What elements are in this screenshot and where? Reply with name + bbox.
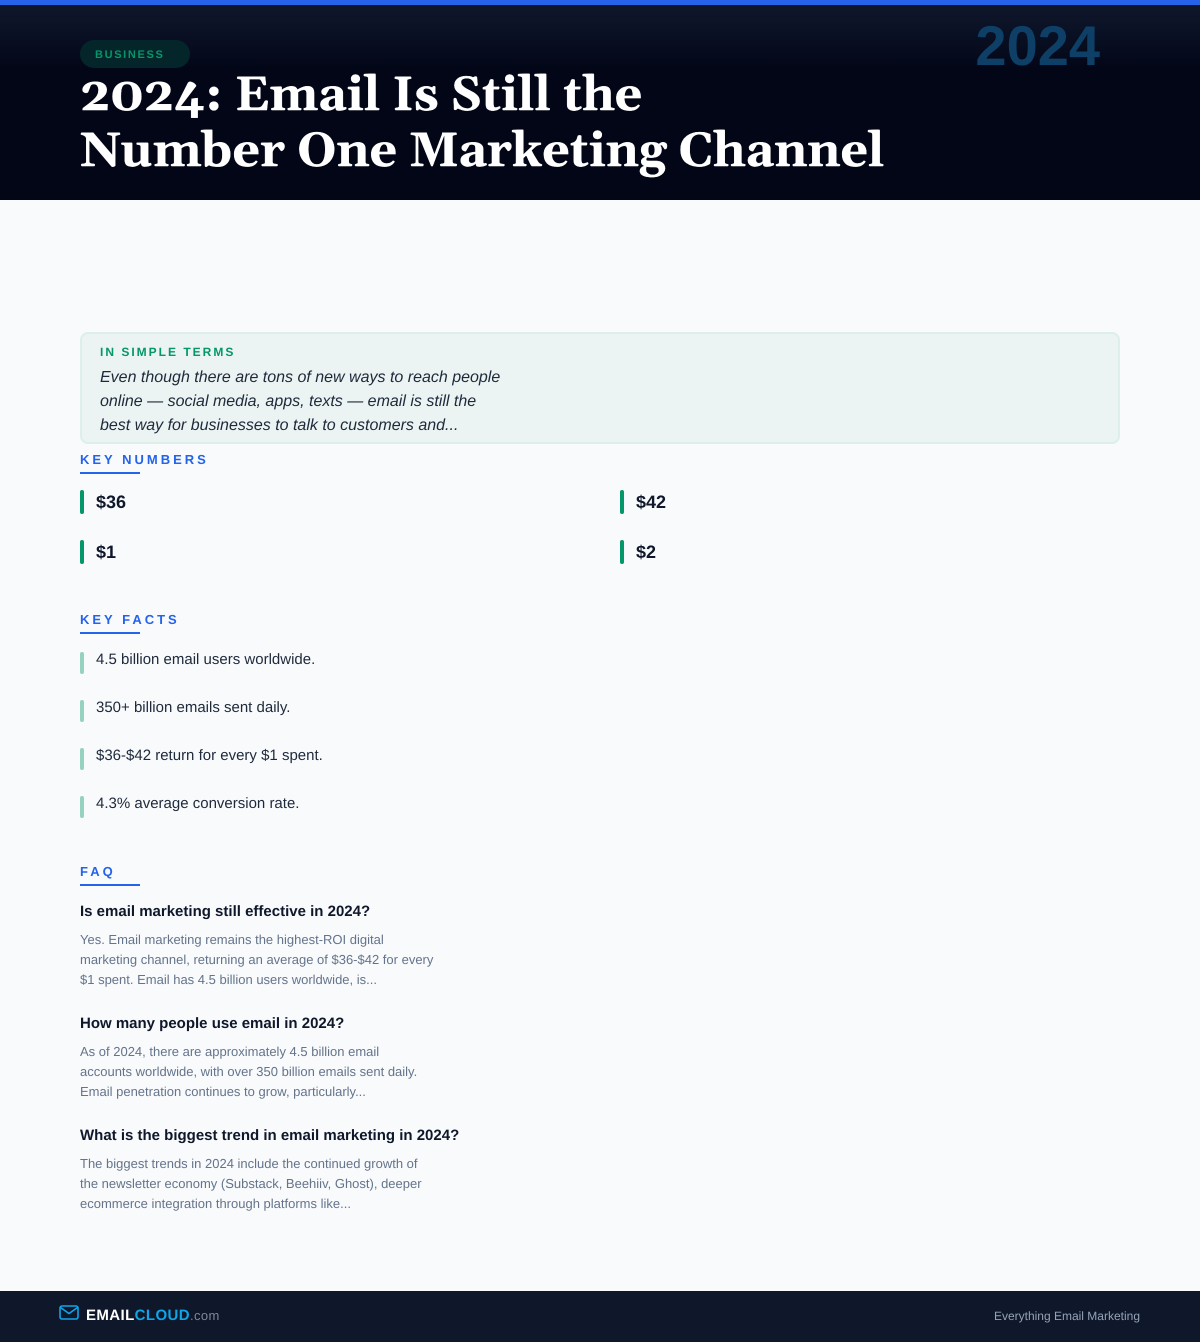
faq item 1: $1 spent. Email has 4.5 billion users worldwide, is... [80,972,377,987]
heading: faq: FAQ [80,864,116,879]
faq item 2: Email penetration continues to grow, particularly... [80,1084,366,1099]
fact: email users [80,651,315,674]
stat: $36: $36 [96,492,126,512]
fact: return: $36-$42 return for every $1 spent. [96,747,323,764]
stat: $36 [80,490,126,514]
fact: emails sent: 350+ billion emails sent daily. [96,699,290,716]
faq item 1: Yes. Email marketing remains the highest-ROI digital [80,932,384,947]
stat: $42: $42 [636,492,666,512]
panel text [100,369,500,434]
faq item 2: How many people use email in 2024? [80,1015,344,1032]
faq item 1: Is email marketing still effective in 2024? [80,903,370,920]
faq item 3: What is the biggest trend in email marketing in 2024? [80,1127,459,1144]
faq item 3: the newsletter economy (Substack, Beehiiv, Ghost), deeper [80,1176,422,1191]
stat: $1: $1 [96,542,116,562]
stat: $1 [80,540,116,564]
heading: key facts: KEY FACTS [80,612,180,627]
faq item 3 [80,1127,459,1211]
title [80,66,884,183]
top accent bar [0,0,1200,5]
panel text: online — social media, apps, texts — email is still the [100,393,476,410]
faq item 2: accounts worldwide, with over 350 billion emails sent daily. [80,1064,417,1079]
faq item 1: marketing channel, returning an average of $36-$42 for every [80,952,433,967]
panel text: best way for businesses to talk to customers and... [100,417,458,434]
faq item 2: As of 2024, there are approximately 4.5 billion email [80,1044,379,1059]
fact: conversion rate: 4.3% average conversion rate. [96,795,299,812]
year watermark: 2024 [975,14,1100,77]
stat: $2 [620,540,656,564]
fact: emails sent [80,699,290,722]
icon: envelope [59,1305,79,1320]
category badge [80,40,190,68]
header band [0,0,1200,200]
panel: in simple terms [80,332,1120,444]
title: 2024: Email Is Still the [80,66,642,127]
faq item 3: The biggest trends in 2024 include the continued growth of [80,1156,418,1171]
fact: conversion rate [80,795,299,818]
faq item 3: ecommerce integration through platforms like... [80,1196,351,1211]
faq item 1 [80,903,434,987]
faq item 2 [80,1015,417,1099]
title: Number One Marketing Channel [80,122,884,183]
fact: email users: 4.5 billion email users worldwide. [96,651,315,668]
panel text: Even though there are tons of new ways to reach people [100,369,500,386]
category badge: BUSINESS [95,49,164,61]
heading: key numbers: KEY NUMBERS [80,452,209,467]
tagline: Everything Email Marketing [994,1309,1140,1323]
brand logo text: EMAILCLOUD.com [86,1307,220,1324]
stat: $42 [620,490,666,514]
fact: return [80,747,323,770]
footer [0,1291,1200,1342]
panel label: IN SIMPLE TERMS [100,345,235,359]
stat: $2: $2 [636,542,656,562]
